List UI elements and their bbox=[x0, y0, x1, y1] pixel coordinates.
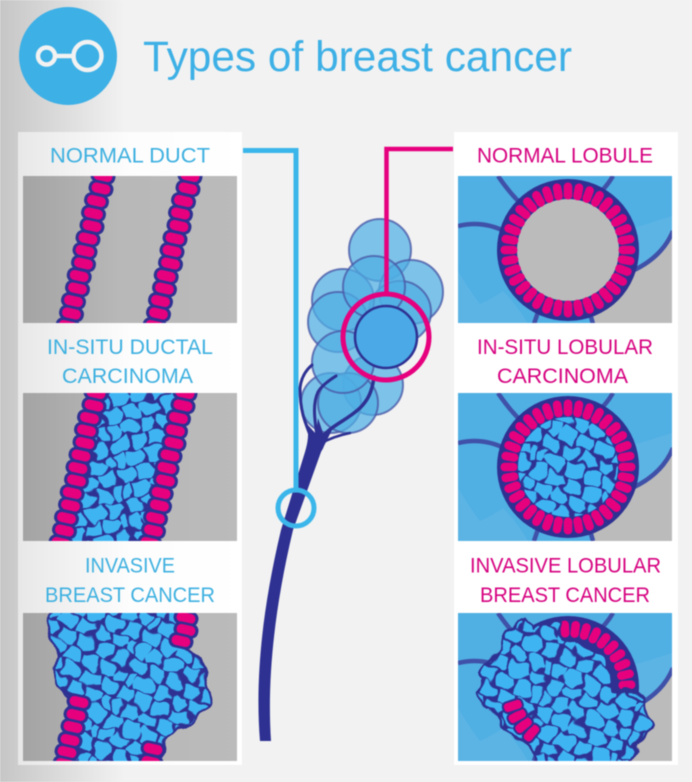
label: in-situ lobular carcinoma bbox=[477, 336, 653, 388]
label: in-situ lobular carcinoma: CARCINOMA bbox=[497, 365, 628, 388]
label: in-situ ductal carcinoma: CARCINOMA bbox=[62, 365, 193, 388]
label: invasive lobular breast cancer: INVASIVE LOBULAR bbox=[470, 554, 661, 578]
label: normal lobule: NORMAL LOBULE bbox=[477, 144, 653, 168]
header icon: linked circles badge bbox=[19, 7, 117, 105]
illustration: invasive breast cancer bbox=[22, 612, 238, 762]
illustration: invasive lobular breast cancer bbox=[457, 612, 673, 762]
connector: normal lobule callout line and ring bbox=[343, 149, 453, 380]
label: in-situ lobular carcinoma: IN-SITU LOBULAR bbox=[477, 336, 653, 359]
title: Types of breast cancer bbox=[143, 33, 572, 81]
label: in-situ ductal carcinoma: IN-SITU DUCTAL bbox=[47, 336, 213, 359]
label: invasive breast cancer: BREAST CANCER bbox=[45, 584, 215, 607]
label: normal duct: NORMAL DUCT bbox=[50, 144, 210, 168]
illustration: in-situ ductal carcinoma bbox=[22, 392, 238, 542]
label: invasive breast cancer: INVASIVE bbox=[85, 554, 175, 578]
illustration: normal duct bbox=[22, 175, 238, 324]
label: invasive lobular breast cancer bbox=[470, 554, 661, 607]
central diagram: lobule cluster bbox=[301, 219, 443, 433]
illustration: in-situ lobular carcinoma bbox=[457, 392, 673, 542]
label: invasive lobular breast cancer: BREAST CANCER bbox=[480, 584, 650, 607]
connector: normal duct callout line and ring bbox=[243, 150, 314, 526]
label: invasive breast cancer bbox=[45, 554, 215, 607]
left white panel: duct stages bbox=[18, 132, 242, 765]
illustration: normal lobule bbox=[457, 175, 673, 324]
label: in-situ ductal carcinoma bbox=[47, 336, 213, 388]
right white panel: lobule stages bbox=[454, 132, 678, 765]
central diagram: duct with branches bbox=[258, 365, 374, 741]
